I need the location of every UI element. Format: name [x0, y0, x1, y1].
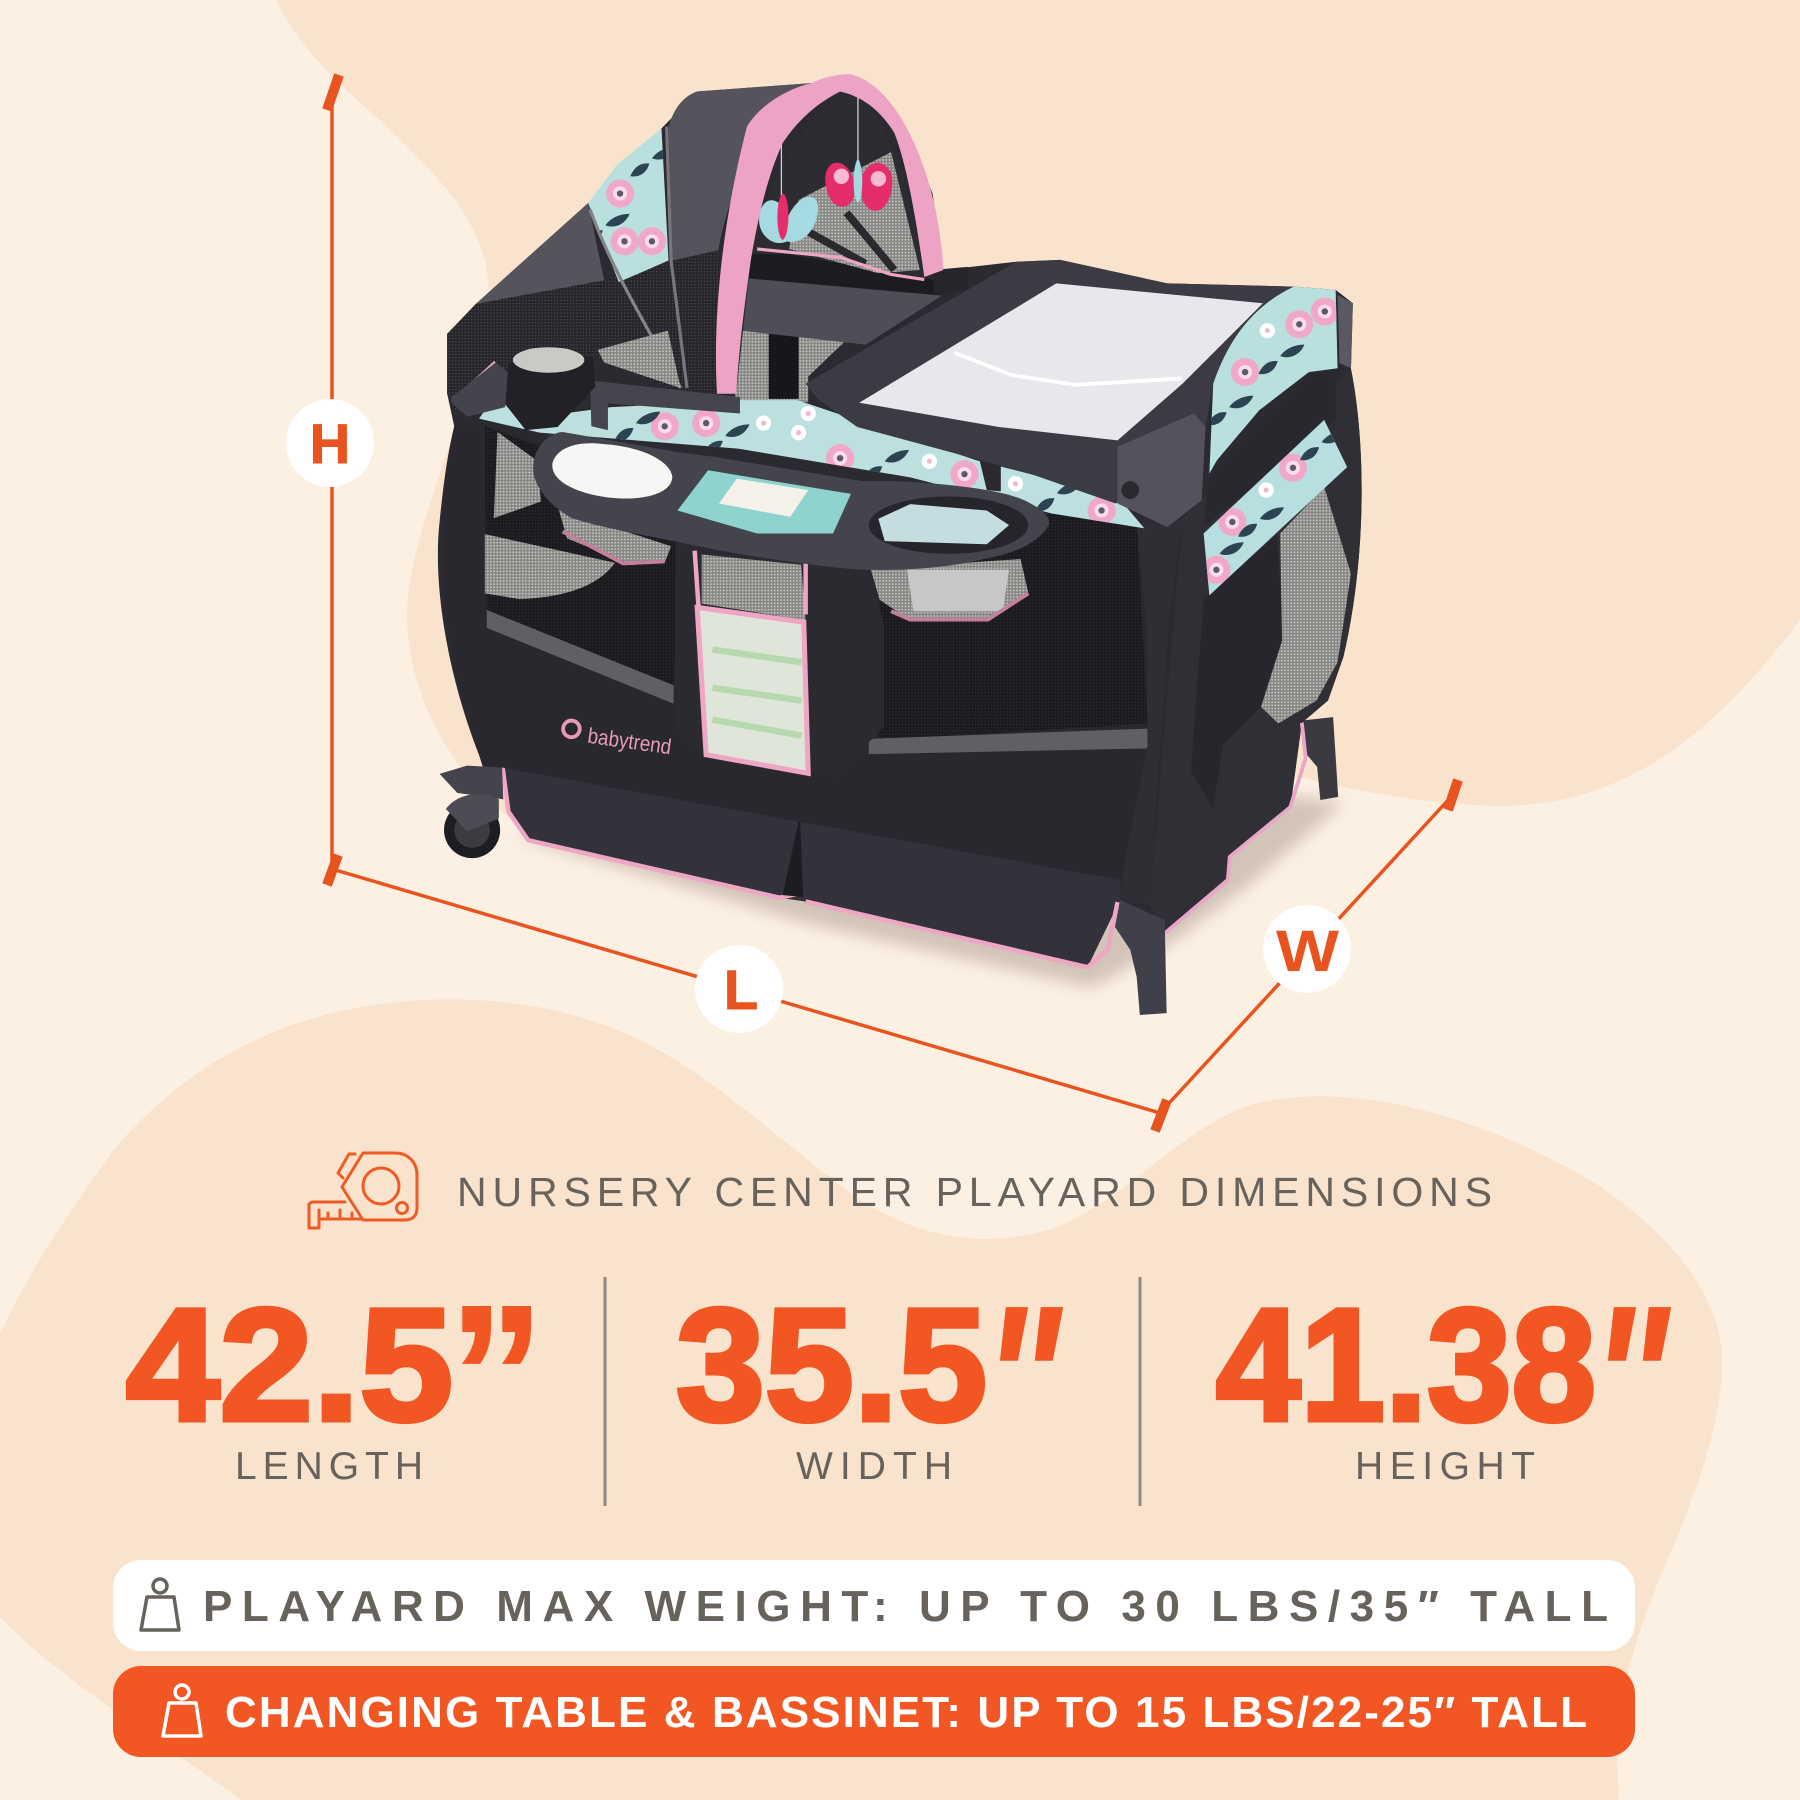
rear panel under arch [735, 248, 968, 402]
changing table pad [806, 260, 1294, 527]
length dimension line with L marker: L [724, 958, 758, 1021]
right front post [1118, 517, 1183, 905]
height dimension line with H marker [286, 75, 374, 885]
bottom background blob [0, 999, 1722, 1800]
heading with tape measure icon [309, 1153, 1492, 1228]
icon: tape measure [309, 1153, 417, 1228]
stat: width [676, 1260, 1064, 1501]
stat: width: 35.5 [676, 1275, 987, 1454]
stat: width: " [982, 1260, 1064, 1501]
stat: length [126, 1262, 545, 1491]
front floral rail [479, 394, 1144, 528]
bar: changing table and bassinet [113, 1666, 1635, 1757]
bar: playard max weight: PLAYARD MAX WEIGHT: UP TO 30 LBS/35″ TALL [203, 1582, 1608, 1631]
pink canopy arch [716, 74, 943, 394]
canopy interior [736, 91, 924, 394]
brand logo text: babytrend [586, 723, 673, 759]
front left mesh [485, 426, 681, 685]
side dark band [1204, 372, 1336, 527]
hanging butterfly toys [759, 88, 892, 243]
stat: height: HEIGHT [1355, 1445, 1535, 1488]
stat: height [1216, 1260, 1672, 1501]
left post [443, 426, 510, 768]
front right mesh [878, 514, 1148, 740]
handle rod [590, 380, 740, 430]
diaper pocket [674, 542, 884, 777]
side floral flap [1198, 420, 1347, 595]
floor shadow [508, 796, 1344, 988]
stat: height: " [1590, 1260, 1672, 1501]
icon: weight [141, 1579, 179, 1630]
rear legs and right side panel [1149, 369, 1362, 933]
icon: weight [163, 1685, 201, 1736]
bar: playard max weight [113, 1560, 1635, 1651]
front panel [483, 426, 1149, 886]
height dimension line with H marker: H [310, 412, 350, 475]
organizer tray with towel, wipes and socks [533, 432, 1049, 570]
bar: changing table and bassinet: CHANGING TABLE & BASSINET: UP TO 15 LBS/22-25″ TALL [225, 1688, 1587, 1737]
stat: length: LENGTH [235, 1445, 423, 1488]
product illustration: nursery center playard [438, 74, 1362, 1015]
width dimension line with W marker: W [1276, 919, 1339, 984]
front skirt [502, 763, 1120, 967]
length dimension line with L marker [332, 869, 1160, 1113]
storage baskets [559, 510, 1029, 620]
top background blob [276, 0, 1800, 868]
stat: width: WIDTH [796, 1445, 952, 1488]
grey panel stripes [487, 610, 1148, 754]
brand logo text [561, 719, 673, 759]
playard dark silhouette [438, 74, 1362, 967]
sound module [451, 347, 595, 430]
stat: length: ’’ [448, 1262, 545, 1491]
canopy hood [447, 83, 811, 410]
width dimension line with W marker [1155, 780, 1458, 1131]
heading text: NURSERY CENTER PLAYARD DIMENSIONS [457, 1169, 1492, 1215]
front right leg [1115, 900, 1167, 1015]
changing table back floral and band [1207, 287, 1353, 473]
stat: length: 42.5 [126, 1275, 453, 1454]
divider lines [605, 1277, 1140, 1506]
stat: height: 41.38 [1216, 1275, 1596, 1454]
caster wheel [440, 766, 503, 858]
side mesh pocket [1261, 487, 1351, 724]
